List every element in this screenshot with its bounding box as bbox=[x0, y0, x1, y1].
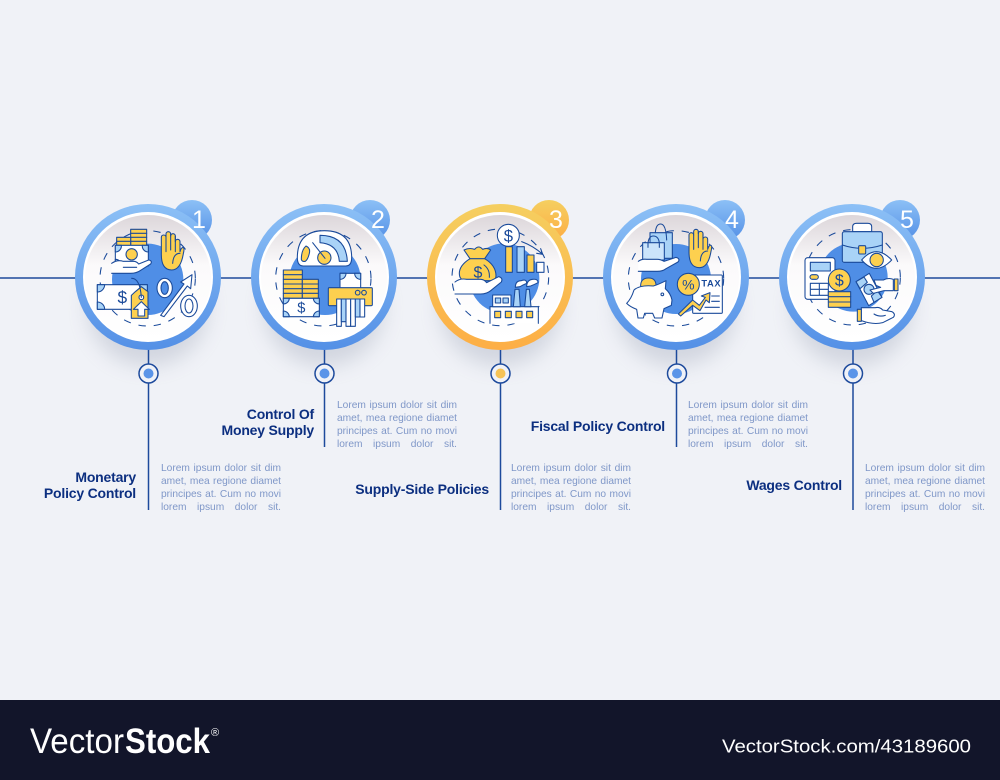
icon: shopping bags, piggy bank and tax: TAX bbox=[701, 279, 721, 289]
brand logo: Stock bbox=[125, 722, 210, 761]
icon: money, hand, tag and percent: $ bbox=[118, 287, 128, 307]
icon: gauge, coins and shredder: $ bbox=[297, 301, 305, 317]
description text: principes at. Cum no movi bbox=[688, 426, 808, 437]
description text: amet, mea regione diamet bbox=[865, 476, 985, 487]
timeline line bbox=[0, 277, 1000, 279]
image id url: VectorStock.com/43189600 bbox=[722, 736, 971, 756]
description text: lorem ipsum dolor sit. bbox=[511, 502, 631, 513]
icon: money bag, bars and factory: $ bbox=[474, 265, 483, 282]
circle badge 2 bbox=[251, 200, 397, 447]
description text: lorem ipsum dolor sit. bbox=[865, 502, 985, 513]
panel: step 1 monetary policy control bbox=[44, 200, 281, 513]
description text bbox=[337, 400, 457, 450]
brand logo: ® bbox=[211, 727, 219, 739]
description text: Lorem ipsum dolor sit dim bbox=[688, 400, 808, 411]
panel: step 3 supply-side policies: Supply-Side Policies bbox=[355, 481, 489, 497]
icon: gauge, coins and shredder bbox=[276, 231, 372, 326]
panel: step 4 fiscal policy control bbox=[531, 200, 808, 450]
circle badge 1: 1 bbox=[192, 206, 206, 234]
icon: money bag, bars and factory: $ bbox=[504, 226, 513, 245]
panel: step 1 monetary policy control: Monetary bbox=[75, 469, 136, 485]
description text: lorem ipsum dolor sit. bbox=[337, 439, 457, 450]
circle badge 2: 2 bbox=[371, 206, 385, 234]
circle badge 4 bbox=[603, 200, 749, 447]
circle badge 3 bbox=[427, 200, 573, 510]
icon: shopping bags, piggy bank and tax: % bbox=[682, 276, 695, 292]
description text: principes at. Cum no movi bbox=[161, 489, 281, 500]
icon: shopping bags, piggy bank and tax bbox=[627, 224, 724, 326]
description text: principes at. Cum no movi bbox=[511, 489, 631, 500]
brand logo bbox=[30, 722, 219, 761]
description text: Lorem ipsum dolor sit dim bbox=[865, 463, 985, 474]
description text bbox=[161, 463, 281, 513]
panel: step 5 wages control bbox=[746, 200, 985, 513]
circle badge 5: 5 bbox=[900, 206, 914, 234]
brand logo: Vector bbox=[30, 722, 124, 761]
icon: briefcase, calculator, coins and hands bbox=[805, 223, 900, 325]
description text bbox=[688, 400, 808, 450]
panel: step 2 control of money supply: Control Of bbox=[247, 406, 314, 422]
description text: amet, mea regione diamet bbox=[511, 476, 631, 487]
description text: amet, mea regione diamet bbox=[688, 413, 808, 424]
icon: money, hand, tag and percent bbox=[97, 229, 197, 326]
description text: lorem ipsum dolor sit. bbox=[688, 439, 808, 450]
circle badge 3: 3 bbox=[549, 206, 563, 234]
description text: principes at. Cum no movi bbox=[337, 426, 457, 437]
circle badge 4: 4 bbox=[725, 206, 739, 234]
panel: step 1 monetary policy control: Policy Control bbox=[44, 485, 136, 501]
description text: Lorem ipsum dolor sit dim bbox=[337, 400, 457, 411]
description text: amet, mea regione diamet bbox=[161, 476, 281, 487]
panel: step 2 control of money supply: Money Supply bbox=[222, 422, 314, 438]
description text: Lorem ipsum dolor sit dim bbox=[161, 463, 281, 474]
circle badge 1 bbox=[75, 200, 221, 510]
description text: amet, mea regione diamet bbox=[337, 413, 457, 424]
description text: principes at. Cum no movi bbox=[865, 489, 985, 500]
panel: step 5 wages control: Wages Control bbox=[746, 477, 842, 493]
icon: money bag, bars and factory bbox=[452, 224, 549, 326]
description text bbox=[511, 463, 631, 513]
icon: briefcase, calculator, coins and hands: $ bbox=[835, 273, 844, 290]
description text bbox=[865, 463, 985, 513]
description text: Lorem ipsum dolor sit dim bbox=[511, 463, 631, 474]
circle badge 5 bbox=[779, 200, 925, 510]
description text: lorem ipsum dolor sit. bbox=[161, 502, 281, 513]
panel: step 3 supply-side policies bbox=[355, 200, 631, 513]
footer bar bbox=[0, 700, 1000, 780]
panel: step 2 control of money supply bbox=[222, 200, 457, 450]
panel: step 4 fiscal policy control: Fiscal Policy Control bbox=[531, 418, 665, 434]
